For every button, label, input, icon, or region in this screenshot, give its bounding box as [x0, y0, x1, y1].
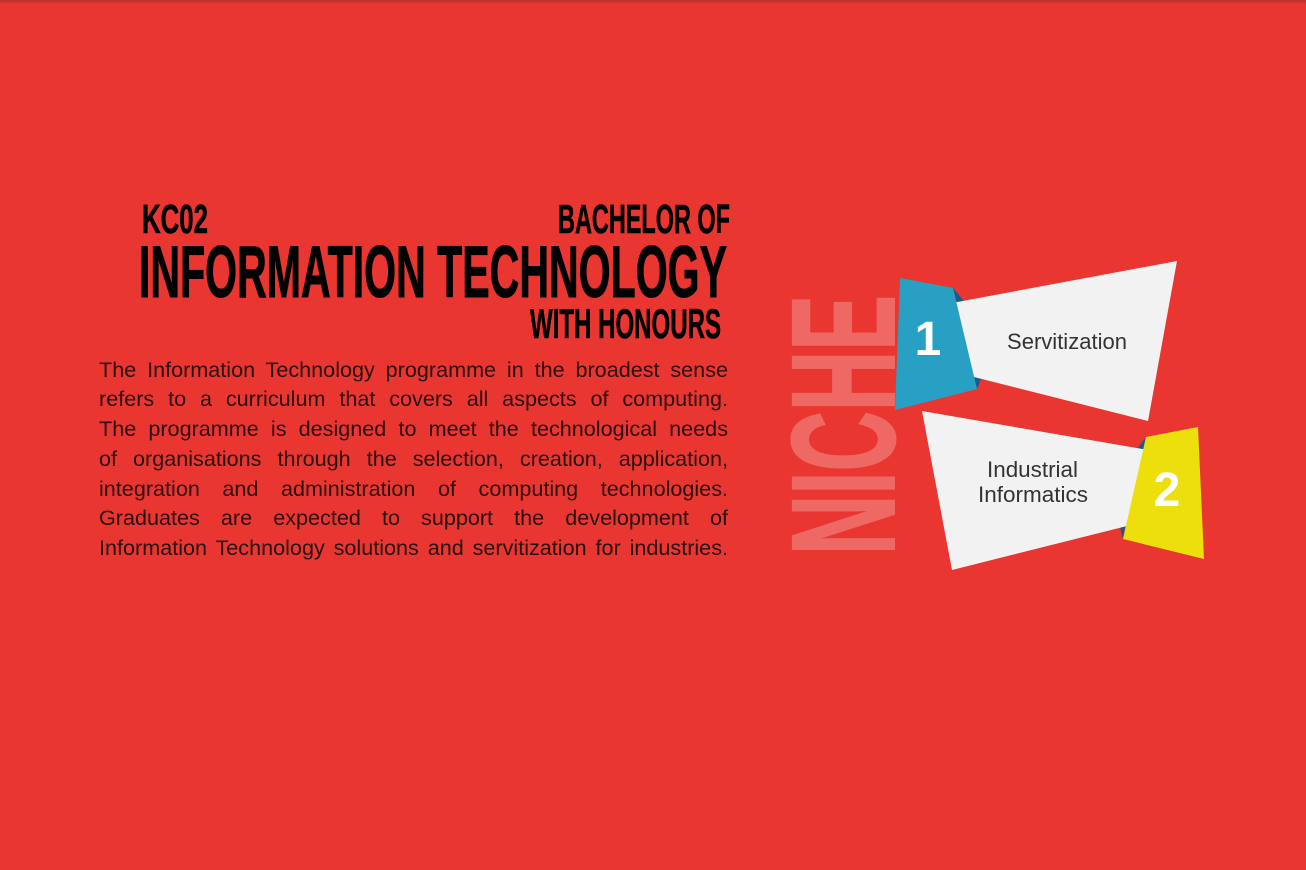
niche item 1: Servitization: Servitization [1007, 329, 1127, 354]
text block: programme description [99, 356, 728, 560]
text block: programme description: The Information Technology programme in the broadest sense [99, 356, 728, 382]
text block: programme description: Graduates are expected to support the development of [99, 505, 728, 530]
text block: programme description: refers to a curriculum that covers all aspects of computing. [99, 386, 728, 411]
heading: programme title: BACHELOR OF [558, 196, 730, 242]
niche item 2: Industrial Informatics: Industrial [987, 457, 1078, 482]
heading: programme title: INFORMATION TECHNOLOGY [139, 232, 727, 313]
text block: programme description: of organisations through the selection, creation, application, [99, 446, 728, 471]
text block: programme description: Information Technology solutions and servitization for industries. [99, 535, 728, 560]
niche item 1: Servitization: 1 [915, 313, 941, 366]
text block: programme description: integration and administration of computing technologies. [99, 476, 728, 500]
niche item 2: Industrial Informatics: Informatics [978, 482, 1088, 507]
heading: programme title: KC02 [142, 196, 208, 242]
niche item 2: Industrial Informatics: 2 [1154, 464, 1180, 517]
niche item 1: Servitization [895, 261, 1177, 421]
vertical label: NICHE: NICHE [762, 295, 926, 555]
text block: programme description: The programme is designed to meet the technological needs [99, 416, 728, 441]
heading: programme title [139, 196, 730, 345]
niche item 2: Industrial Informatics [922, 411, 1204, 570]
